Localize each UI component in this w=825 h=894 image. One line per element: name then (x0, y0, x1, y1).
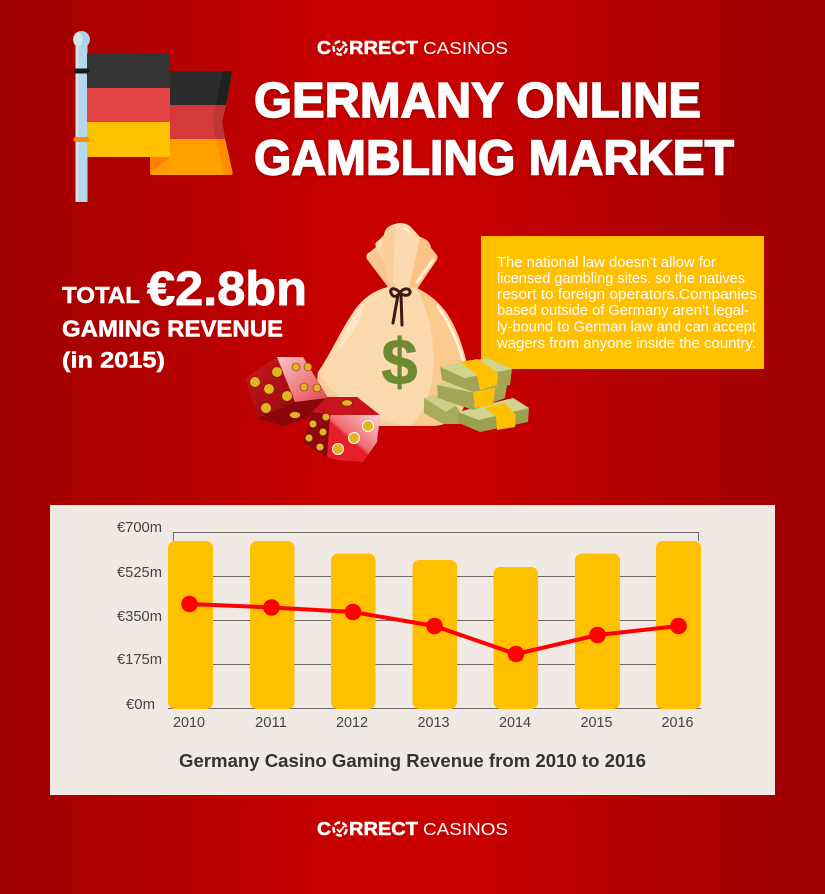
icon: stacks of banknotes (424, 358, 529, 432)
y axis labels: €0m (126, 697, 155, 713)
x axis labels: 2012 (336, 715, 368, 731)
bottom right stack (458, 398, 529, 432)
callout: national law: wagers from anyone inside the country. (496, 336, 756, 352)
x axis labels: 2010 (173, 715, 205, 731)
logo: bottom: RRECT (349, 819, 418, 839)
logo: bottom: C (317, 819, 331, 839)
logo: bottom (317, 819, 508, 839)
die: right (303, 397, 380, 462)
x axis labels: 2011 (255, 715, 287, 731)
die: left (245, 357, 328, 426)
icon: dice (245, 357, 380, 462)
callout: national law: based outside of Germany aren’t legal- (497, 303, 749, 319)
middle stack (437, 377, 507, 410)
icon: money bag: $ (381, 325, 418, 398)
line series (181, 596, 687, 662)
callout: national law: The national law doesn’t allow for (497, 255, 716, 271)
callout: national law: ly-bound to German law and can accept (497, 320, 756, 336)
callout: national law (481, 236, 764, 369)
x axis labels: 2013 (418, 715, 450, 731)
top stack (440, 358, 512, 392)
icon: German flag (73, 31, 233, 202)
icon: money bag (317, 223, 469, 426)
title (254, 74, 734, 186)
panel: revenue chart (50, 505, 775, 795)
y axis labels: €175m (117, 652, 162, 668)
title: GERMANY ONLINE (254, 74, 701, 128)
total revenue text: €2.8bn (147, 263, 307, 316)
y axis labels (117, 520, 162, 713)
icon: logo chip (334, 822, 346, 836)
bottom left stack (424, 393, 460, 424)
bars (168, 541, 701, 709)
icon: logo chip (334, 42, 346, 54)
total revenue text: (in 2015) (62, 348, 165, 372)
x axis labels: 2016 (662, 715, 694, 731)
y axis labels: €700m (117, 520, 162, 536)
callout: national law: licensed gambling sites. so the natives (497, 271, 745, 287)
title: GAMBLING MARKET (254, 132, 734, 186)
total revenue text: TOTAL (62, 282, 140, 308)
logo: bottom: CASINOS (423, 819, 508, 839)
y axis labels: €350m (117, 609, 162, 625)
chart caption: Germany Casino Gaming Revenue from 2010 to 2016 (179, 750, 646, 771)
total revenue text (62, 263, 307, 372)
icon: rope knot (391, 289, 410, 325)
logo: top (317, 38, 508, 58)
total revenue text: GAMING REVENUE (62, 316, 283, 342)
x axis labels: 2015 (580, 715, 612, 731)
logo: top: C (317, 38, 331, 58)
logo: top: RRECT (349, 38, 418, 58)
x axis labels: 2014 (499, 715, 531, 731)
grid lines (168, 532, 701, 708)
callout: national law: resort to foreign operators.Companies (497, 287, 757, 303)
y axis labels: €525m (117, 565, 162, 581)
logo: top: CASINOS (423, 38, 508, 58)
x axis labels (173, 715, 694, 731)
